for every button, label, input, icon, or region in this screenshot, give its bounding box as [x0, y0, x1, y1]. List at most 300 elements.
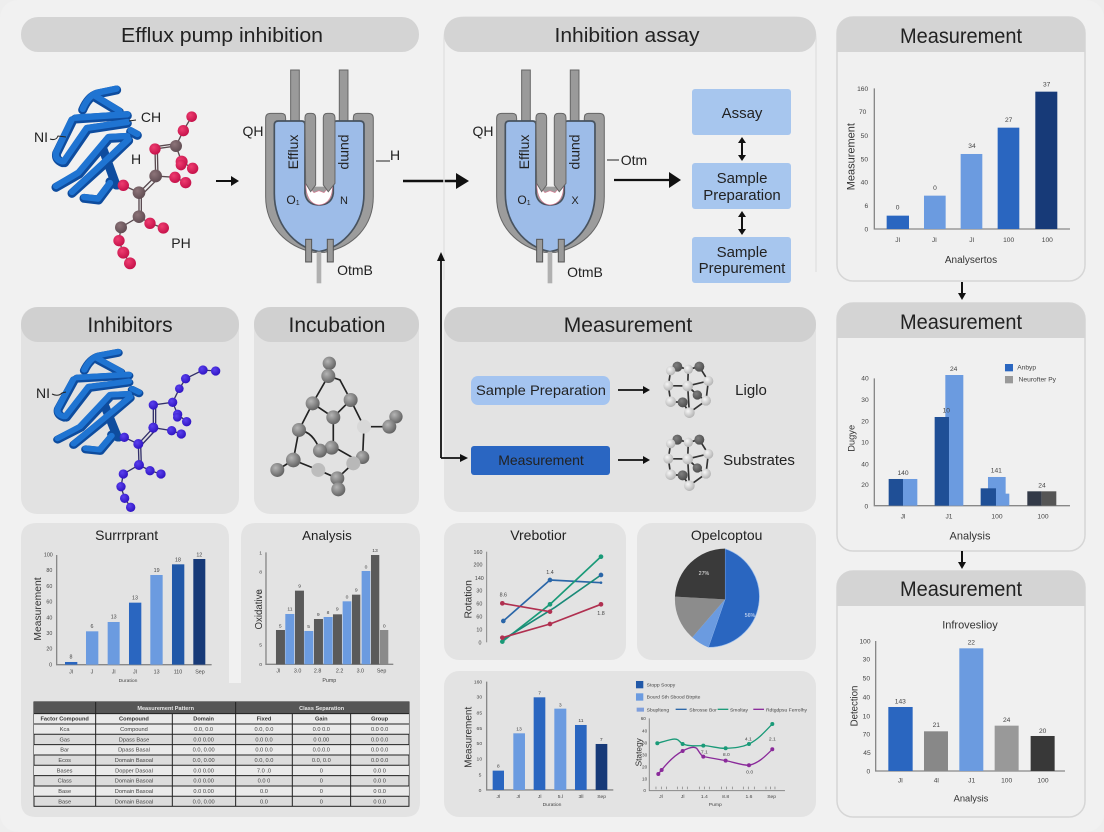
data table: 0 — [320, 789, 323, 795]
bar chart with title: Analysis — [954, 794, 989, 804]
step pill: sample preparation: Sample Preparation — [476, 382, 606, 398]
data table: Bar — [60, 748, 69, 754]
chart: analysis: 9 — [336, 606, 339, 612]
data table: 0 0.00 — [313, 737, 329, 743]
panel: vrebotior line chart — [444, 523, 626, 660]
data table: Domain Basoal — [115, 779, 153, 785]
bar chart: 30 — [477, 694, 482, 700]
grouped bar chart: 10 — [943, 408, 950, 415]
illustration: red ligand molecule — [113, 111, 198, 269]
arrow: efflux to assay — [403, 173, 469, 189]
line chart with legend: 4.1 — [745, 737, 752, 743]
assay pump labels: X — [571, 195, 579, 207]
bar chart with title: 40 — [863, 694, 870, 701]
panel: vrebotior line chart: 200 — [474, 563, 482, 569]
data table: 0.0 0.0 — [313, 727, 330, 733]
step: sample prepurement — [692, 237, 791, 283]
bar chart with title: 143 — [895, 698, 906, 705]
chart: surrprant: 60 — [46, 584, 52, 590]
line chart with legend — [633, 681, 807, 808]
bar chart: 0 — [479, 788, 482, 794]
panel: vrebotior line chart: 8.6 — [500, 593, 507, 599]
line chart with legend: 30 — [642, 752, 648, 757]
data table: 0.0 0.00 — [193, 789, 214, 795]
data table: Factor Compound — [40, 717, 89, 723]
molecule labels: H — [131, 151, 141, 167]
line chart with legend: 8.8 — [722, 794, 729, 800]
bar chart: Jl — [538, 794, 541, 800]
pump labels: pump — [338, 134, 354, 170]
data table: Domain Basoal — [115, 789, 153, 795]
bar chart: 0 — [896, 204, 900, 211]
panel: vrebotior line chart: 60 — [476, 602, 482, 608]
heading — [837, 17, 1085, 52]
grouped bar chart: 24 — [950, 366, 958, 373]
bar chart: 7 — [600, 737, 603, 743]
data table: Bases — [57, 768, 73, 774]
bar chart: 50 — [861, 133, 868, 140]
chart: analysis: 8 — [259, 569, 262, 575]
pump labels: 1 — [296, 200, 300, 207]
grouped bar chart: Analysis — [950, 531, 991, 543]
grouped bar chart — [846, 364, 1070, 543]
chart: surrprant: 19 — [154, 568, 160, 574]
panel: measurement centre — [444, 307, 816, 512]
illustration: grey molecule — [270, 357, 403, 496]
panel: opelcoptou pie chart: Opelcoptou — [691, 527, 762, 543]
line chart with legend: 0.0 — [746, 770, 753, 776]
bar chart: 3ll — [578, 794, 583, 800]
bar chart with title: J1 — [968, 778, 975, 785]
line chart with legend: 20 — [642, 764, 648, 769]
bar chart with title: Jl — [898, 778, 903, 785]
chart: surrprant: 30 — [46, 631, 52, 637]
heading: Measurement — [900, 578, 1022, 601]
bar chart: 0 — [933, 185, 937, 192]
arrow: measurement 1 to 2 — [958, 282, 966, 300]
line chart with legend: 1.6 — [746, 794, 753, 800]
panel: vrebotior line chart: 60 — [476, 614, 482, 620]
step: sample preparation: Preparation — [703, 187, 781, 204]
heading — [254, 307, 419, 342]
panel: measurement bottom — [837, 571, 1085, 817]
bar chart: 160 — [474, 680, 482, 686]
data table: Base — [58, 799, 71, 805]
data table: 0.0 0.00 — [193, 737, 214, 743]
chart: analysis: 1 — [259, 550, 262, 556]
assay pump labels: pump — [569, 134, 585, 170]
step pill: measurement — [471, 446, 610, 475]
chart: analysis: Analysis — [302, 528, 352, 543]
legend — [636, 681, 807, 713]
line chart with legend: 60 — [641, 716, 646, 721]
chart: analysis: 9 — [355, 588, 358, 594]
arrow — [618, 386, 650, 394]
bar chart: Duration — [543, 802, 562, 808]
diagram: assay pump — [497, 70, 604, 283]
panel: opelcoptou pie chart: 56% — [745, 613, 756, 619]
pump labels: Efflux — [285, 135, 301, 169]
data table: Kca — [60, 727, 70, 733]
bar chart with title: 22 — [968, 640, 975, 647]
pump labels: O — [286, 193, 296, 207]
pump labels: QH — [242, 123, 264, 139]
line chart with legend: Pump — [709, 802, 722, 808]
data table: 0 0.0 — [373, 799, 386, 805]
line chart with legend: Jl — [659, 794, 663, 800]
panel: incubation — [254, 307, 419, 514]
icon: molecule — [663, 435, 713, 491]
legend: Rdtgdpsu Ferrolhy — [766, 707, 807, 713]
chart: surrprant: Measurement — [33, 577, 44, 641]
data table: 0.0 0.0 — [371, 737, 388, 743]
chart: surrprant: 0 — [49, 663, 52, 669]
chart: analysis: 3.0 — [294, 669, 301, 675]
assay pump labels: OtmB — [567, 264, 603, 280]
heading: inhibition assay — [444, 17, 816, 52]
chart: analysis: 13 — [372, 548, 378, 554]
data table: 0.0 0 — [373, 779, 386, 785]
data table: 0.0 — [260, 799, 268, 805]
line chart with legend: 8.0 — [723, 752, 730, 758]
bar chart: Jl — [969, 237, 975, 244]
bar chart with title: 10 — [863, 713, 870, 720]
arrow: protein to pump — [216, 176, 239, 186]
data table: Gas — [59, 737, 70, 743]
bar chart with title — [850, 620, 1065, 804]
grouped bar chart: 40 — [861, 376, 869, 383]
bar chart: 40 — [861, 180, 868, 187]
data table: Dpass Basal — [118, 748, 150, 754]
data table: 0.0 0 — [373, 768, 386, 774]
panel: inhibition assay — [444, 17, 816, 283]
grouped bar chart: 0 — [864, 503, 868, 510]
bar chart with title: 0 — [866, 768, 870, 775]
bar chart: 13 — [516, 726, 522, 732]
data table: Dopper Dasoal — [115, 768, 153, 774]
chart: surrprant: Jl — [69, 670, 73, 676]
pump labels: N — [340, 195, 348, 207]
bar chart: 100 — [1042, 237, 1053, 244]
data table: 0.0, 0.00 — [193, 748, 215, 754]
step pill: measurement: Measurement — [498, 452, 584, 468]
arrow — [618, 456, 650, 464]
bar chart with title: 100 — [1001, 778, 1012, 785]
bar chart: Jl — [517, 794, 520, 800]
grouped bar chart: 30 — [861, 397, 869, 404]
line chart with legend: 0 — [643, 788, 646, 793]
legend: Bourd Sth Sbood Btrpite — [647, 695, 701, 701]
chart: surrprant: Jl — [133, 670, 137, 676]
panel: opelcoptou pie chart: 27% — [699, 571, 710, 577]
step: sample preparation — [692, 163, 791, 209]
data table: Ecos — [58, 758, 71, 764]
line chart with legend: Sep — [767, 794, 776, 800]
panel: inhibitors — [21, 307, 239, 514]
panel: vrebotior line chart: 0 — [479, 640, 482, 646]
bar chart with title: 24 — [1003, 717, 1011, 724]
grouped bar chart: 100 — [991, 513, 1003, 520]
chart: surrprant: 110 — [174, 670, 182, 676]
bar chart: 34 — [968, 143, 976, 150]
data table: Base — [58, 789, 71, 795]
grouped bar chart: Jl — [901, 513, 906, 520]
bar chart: 6 — [864, 203, 868, 210]
heading: efflux pump inhibition: Efflux pump inhibition — [121, 25, 323, 47]
data table: 0.0, 0.0 — [255, 727, 273, 733]
data table: 0.0 0.0 — [371, 748, 388, 754]
data table: Measurement Pattern — [137, 706, 195, 712]
bar chart: 65 — [477, 726, 482, 732]
panel: vrebotior line chart: Rotation — [463, 580, 474, 619]
bar chart: 160 — [857, 86, 869, 93]
assay pump labels — [472, 123, 647, 280]
chart: analysis: Sep — [377, 669, 386, 675]
data table: Compound — [120, 727, 148, 733]
chart: analysis: 11 — [287, 607, 293, 613]
grouped bar chart: Dugye — [846, 425, 856, 452]
bar chart: 5.l — [558, 794, 563, 800]
chart: surrprant: Surrrprant — [95, 527, 158, 543]
arrow: double — [738, 137, 746, 161]
chart: surrprant: 8 — [70, 655, 73, 661]
legend — [1005, 364, 1057, 384]
illustration: purple molecule — [116, 365, 220, 512]
assay pump labels: 1 — [527, 200, 531, 207]
panel: bottom bar and line charts — [444, 671, 816, 817]
grouped bar chart: 10 — [861, 440, 869, 447]
illustration: protein — [57, 352, 139, 451]
chart: analysis: 5 — [259, 589, 262, 595]
data table: 0.0, 0.0 — [255, 758, 273, 764]
chart: surrprant: 80 — [46, 568, 52, 574]
legend: Smoltay — [730, 707, 748, 713]
data table: 0.0 — [260, 789, 268, 795]
step: sample prepurement: Prepurement — [699, 260, 786, 277]
chart: surrprant: 6 — [91, 624, 94, 630]
grouped bar chart: 20 — [861, 418, 869, 425]
panel: vrebotior line chart: 140 — [475, 576, 484, 582]
pump labels — [242, 123, 400, 278]
assay pump labels: O — [517, 193, 527, 207]
chart: analysis: 2.2 — [336, 669, 343, 675]
data table: 0 0.0 — [373, 789, 386, 795]
panel: efflux pump inhibition — [21, 17, 419, 283]
heading: efflux pump inhibition — [21, 17, 419, 52]
bar chart — [464, 680, 613, 808]
chart: analysis: 2.8 — [314, 669, 321, 675]
label: Substrates: Substrates — [723, 452, 795, 469]
line chart with legend: 30 — [642, 740, 648, 745]
bar chart with title: 21 — [933, 722, 940, 729]
step: sample preparation: Sample — [717, 170, 767, 187]
assay pump labels: Otm — [621, 152, 647, 168]
chart: surrprant: Jl — [112, 670, 116, 676]
grouped bar chart: 140 — [897, 470, 909, 477]
legend: Anbyp — [1017, 365, 1036, 372]
chart: surrprant: 13 — [111, 615, 117, 621]
chart: surrprant: 13 — [132, 596, 138, 602]
bar chart: 10 — [477, 756, 482, 762]
bar chart: 8 — [497, 764, 500, 770]
bar chart: Sep — [597, 794, 606, 800]
bar chart: 37 — [1043, 82, 1051, 89]
molecule labels: PH — [171, 235, 191, 251]
data table: 0.0 0 — [258, 779, 270, 785]
bar chart with title: 4l — [934, 778, 939, 785]
heading: Measurement — [564, 314, 692, 337]
panel: charts and table — [21, 523, 420, 817]
data table: 0.0, 0.0 — [312, 758, 331, 764]
heading — [444, 307, 816, 342]
heading: Measurement — [900, 25, 1022, 48]
panel: vrebotior line chart: Vrebotior — [510, 527, 567, 543]
bar chart with title: Detection — [850, 686, 861, 726]
chart: surrprant: 18 — [175, 558, 181, 564]
grouped bar chart: J1 — [945, 513, 953, 520]
step: assay — [692, 89, 791, 135]
bar chart: 85 — [477, 711, 482, 717]
label: Liglo: Liglo — [735, 382, 767, 399]
bar chart with title: 70 — [863, 732, 870, 739]
chart: surrprant — [33, 527, 212, 684]
data table: Domain Basoal — [115, 799, 153, 805]
panel: measurement middle — [837, 303, 1085, 551]
chart: surrprant: 20 — [46, 646, 52, 652]
data table: Group — [371, 717, 389, 723]
panel: vrebotior line chart: 10 — [476, 627, 482, 633]
bar chart: Analysertos — [945, 255, 997, 266]
legend: Sbuplteng — [647, 707, 669, 713]
chart: analysis: 8 — [327, 610, 330, 616]
line chart with legend: Stategy — [633, 737, 643, 766]
bar chart with title: 30 — [863, 657, 870, 664]
chart: surrprant: 60 — [46, 600, 52, 606]
molecule labels: CH — [141, 109, 161, 125]
assay pump labels: Efflux — [516, 135, 532, 169]
chart: surrprant: 100 — [44, 553, 53, 559]
chart: analysis: 5 — [259, 643, 262, 649]
bar chart with title: 50 — [863, 675, 870, 682]
legend: Stopp Soopy — [647, 682, 676, 688]
chart: analysis: 0 — [346, 594, 349, 600]
bar chart: 0 — [864, 226, 868, 233]
heading: Measurement — [900, 311, 1022, 334]
data table: 0 — [320, 779, 323, 785]
panel: measurement top — [837, 17, 1085, 281]
chart: analysis: 0 — [365, 565, 368, 571]
diagram: efflux pump — [266, 70, 373, 283]
chart: analysis: Pump — [322, 678, 336, 684]
heading — [837, 303, 1085, 338]
data table: Class Separation — [299, 706, 345, 712]
arrow: measurement 2 to 3 — [958, 551, 966, 569]
line chart with legend: Jl — [681, 794, 684, 800]
chart: surrprant: J — [91, 670, 94, 676]
grouped bar chart: 100 — [1037, 513, 1049, 520]
data table: 0.0 0.00 — [193, 768, 214, 774]
panel: vrebotior line chart: 1.8 — [597, 611, 605, 617]
pump labels: H — [390, 147, 400, 163]
bar chart: 3 — [559, 702, 562, 708]
chart: surrprant: 13 — [154, 670, 160, 676]
chart: analysis: Jl — [276, 669, 280, 675]
pump labels: OtmB — [337, 262, 373, 278]
data table: 0.0 0.0 — [371, 758, 388, 764]
chart: surrprant: Duration — [119, 678, 138, 684]
step: assay: Assay — [722, 105, 763, 122]
step pill: sample preparation — [471, 376, 610, 405]
chart: surrprant: Sep — [195, 670, 205, 676]
chart: analysis: 9 — [317, 612, 320, 618]
data table: 0.0, 0.0 — [194, 727, 213, 733]
bar chart: 7 — [538, 690, 541, 696]
data table: Dpass Base — [119, 737, 149, 743]
bar chart — [845, 82, 1070, 266]
bar chart: Jl — [497, 794, 500, 800]
line chart with legend: 40 — [642, 728, 648, 733]
label: NI — [36, 385, 66, 401]
bar chart with title: 20 — [1039, 728, 1047, 735]
heading — [837, 571, 1085, 606]
label: NI: NI — [36, 385, 50, 401]
line chart with legend: 10 — [642, 777, 648, 782]
icon: molecule — [663, 362, 713, 418]
panel: opelcoptou pie chart — [637, 523, 816, 660]
grouped bar chart: 20 — [861, 482, 869, 489]
chart: analysis: 5 — [307, 624, 310, 630]
arrow: double lower — [738, 211, 746, 235]
bar chart: 50 — [861, 156, 868, 163]
heading: inhibition assay: Inhibition assay — [554, 25, 700, 47]
bar chart: Jl — [895, 237, 901, 244]
arrow: pump to steps — [614, 172, 681, 188]
data table: 0 — [320, 768, 323, 774]
bar chart: 5 — [479, 773, 482, 779]
line chart with legend: 2.1 — [769, 736, 776, 742]
chart: analysis: 3.0 — [357, 669, 364, 675]
step: sample prepurement: Sample — [717, 244, 767, 261]
bar chart: 50 — [477, 741, 482, 747]
bar chart: Measurement — [464, 707, 475, 768]
data table: 0.0 0.0 — [255, 737, 273, 743]
chart: analysis — [254, 528, 393, 684]
data table: 0.0 0.0 — [371, 727, 388, 733]
line chart with legend: 7.1 — [701, 749, 708, 755]
bar chart with title: 100 — [859, 638, 871, 645]
data table: 0.0.0.0 — [313, 748, 330, 754]
heading: Inhibitors — [87, 314, 173, 337]
chart: analysis: 5 — [279, 623, 282, 629]
heading: Incubation — [289, 314, 385, 337]
data table: 0.0 0.00 — [193, 779, 214, 785]
data table: Gain — [315, 717, 328, 723]
molecule labels: NI — [34, 129, 48, 145]
data table: Fixed — [257, 717, 272, 723]
data table: 0.0, 0.00 — [193, 758, 215, 764]
bar chart with title: 45 — [863, 750, 871, 757]
chart: analysis: 0 — [383, 623, 386, 629]
data table: Compound — [119, 717, 149, 723]
legend: Sbrosse Bor — [689, 707, 717, 713]
grouped bar chart: 141 — [991, 467, 1002, 474]
data table: 0.0, 0.00 — [193, 799, 215, 805]
data table: 0 — [320, 799, 323, 805]
bar chart: Measurement — [845, 123, 857, 190]
heading — [21, 307, 239, 342]
line chart with legend: 1.4 — [701, 794, 708, 800]
data table: Domain — [193, 717, 215, 723]
